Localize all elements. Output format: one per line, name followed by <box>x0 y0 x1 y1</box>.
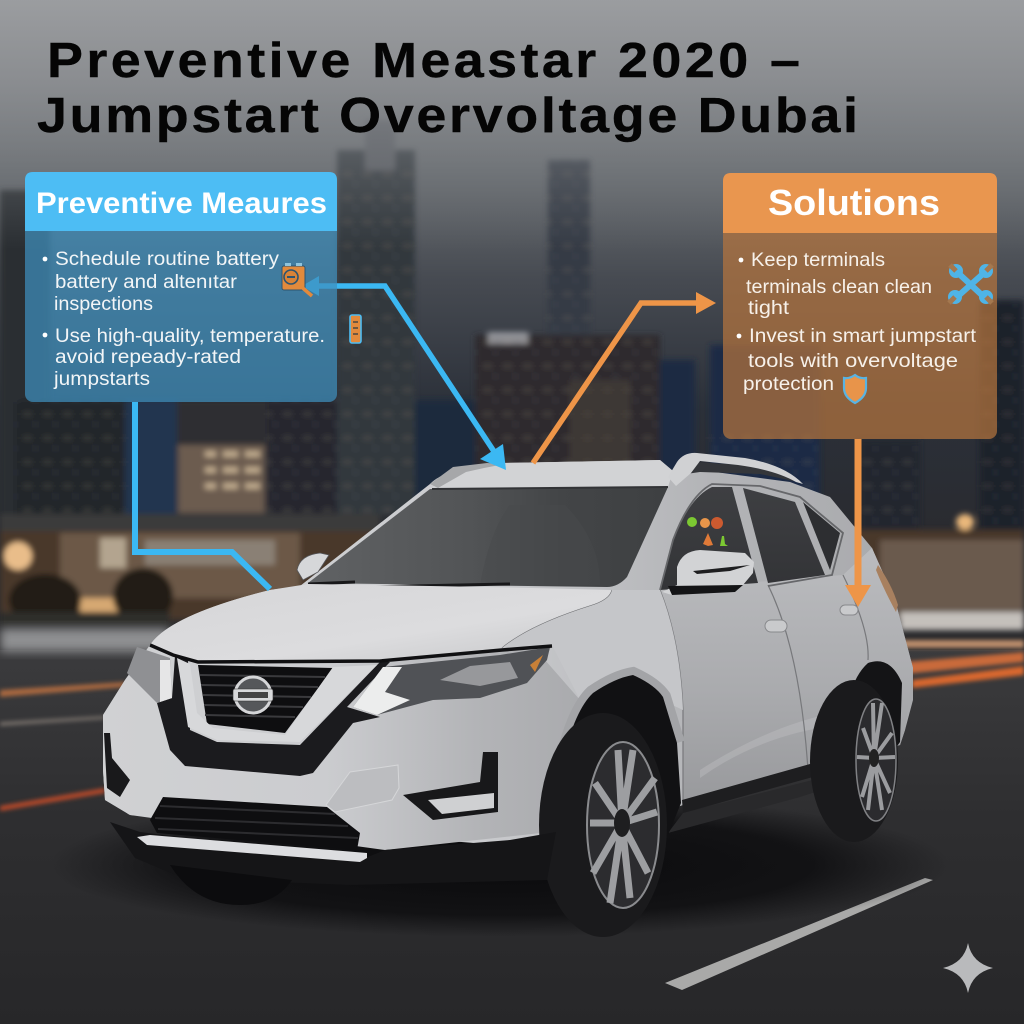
left headlight <box>127 647 172 703</box>
rear wheel arch <box>842 661 902 780</box>
upper body and roof <box>103 460 913 850</box>
title <box>37 32 858 142</box>
heading: solutions: Solutions <box>768 182 940 223</box>
hood <box>150 584 612 662</box>
bullet list: Schedule routine battery <box>55 249 280 270</box>
lower grille <box>150 797 360 850</box>
chrome skid plate <box>137 835 367 862</box>
black V surround <box>157 656 390 776</box>
icon: small battery <box>350 315 361 343</box>
arrow: orange from solutions panel to car door <box>845 439 871 607</box>
car shadow <box>50 793 950 937</box>
heading: preventive measures: Preventive Meaures <box>36 187 327 220</box>
bullet list: tight <box>748 297 790 319</box>
icon: crossed wrenches <box>948 264 993 304</box>
right headlight <box>353 647 550 715</box>
middle side window <box>743 488 825 583</box>
bullet list: Keep terminals <box>751 249 885 271</box>
wipers <box>308 582 510 587</box>
icon: battery with magnifier <box>282 263 312 296</box>
rear wheel <box>810 680 898 842</box>
front fender and bumper <box>103 645 600 850</box>
fog cover panel <box>326 765 399 812</box>
hood edge line <box>150 645 552 662</box>
lower black bumper <box>110 822 556 885</box>
front tyre under bumper <box>170 865 292 905</box>
front wheel arch <box>548 675 681 880</box>
bullet list: Invest in smart jumpstart <box>749 325 977 347</box>
front side window <box>660 487 758 590</box>
bullet list <box>43 249 325 390</box>
bullet list: inspections <box>54 294 153 315</box>
upper grille <box>198 665 333 733</box>
door shut lines <box>660 575 868 800</box>
roof top highlight <box>432 460 673 488</box>
Nissan badge <box>233 677 273 713</box>
roof rail left <box>430 463 505 488</box>
chrome V <box>177 658 377 742</box>
arrow: orange to solutions panel <box>533 292 716 463</box>
left door mirror <box>297 553 329 580</box>
front fender upper <box>502 590 683 710</box>
bullet list: Use high-quality, temperature. <box>55 326 325 347</box>
bullet list: protection <box>743 373 834 395</box>
windshield <box>308 487 668 587</box>
panel header <box>25 172 337 231</box>
window trim <box>660 484 843 590</box>
fog lamp surround <box>403 752 498 820</box>
bullet list <box>737 249 977 395</box>
rear quarter window <box>803 502 840 570</box>
background: blurred Dubai night skyline <box>0 0 1024 660</box>
left corner vent <box>104 733 130 797</box>
road lane marking <box>665 878 933 990</box>
road surface <box>0 628 1024 1024</box>
roof rail right <box>668 453 803 486</box>
title: Preventive Meastar 2020 – <box>47 32 800 87</box>
bullet list: battery and altenıtar <box>55 272 238 293</box>
sill <box>668 755 842 833</box>
car: Nissan Rogue SUV <box>50 453 950 937</box>
icon: shield <box>844 375 866 403</box>
panel: preventive measures <box>25 172 337 402</box>
arrow: blue double arrow from car to inspection icon <box>302 276 506 470</box>
panel: solutions <box>723 173 997 439</box>
side door panels <box>660 548 913 805</box>
side mirror <box>662 550 754 595</box>
bullet list: avoid repeady-rated <box>55 347 241 368</box>
title: Jumpstart Overvoltage Dubai <box>37 87 858 142</box>
panel header <box>723 173 997 233</box>
sparkle watermark <box>943 943 993 993</box>
bullet list: terminals clean clean <box>746 276 932 298</box>
bullet list: jumpstarts <box>53 369 150 390</box>
window display icons <box>687 517 728 546</box>
door handles <box>765 605 858 632</box>
connector: blue line from left panel to car <box>135 402 270 589</box>
bullet list: tools with overvoltage <box>748 350 958 372</box>
rear tail light <box>876 565 898 612</box>
front wheel <box>539 713 667 937</box>
